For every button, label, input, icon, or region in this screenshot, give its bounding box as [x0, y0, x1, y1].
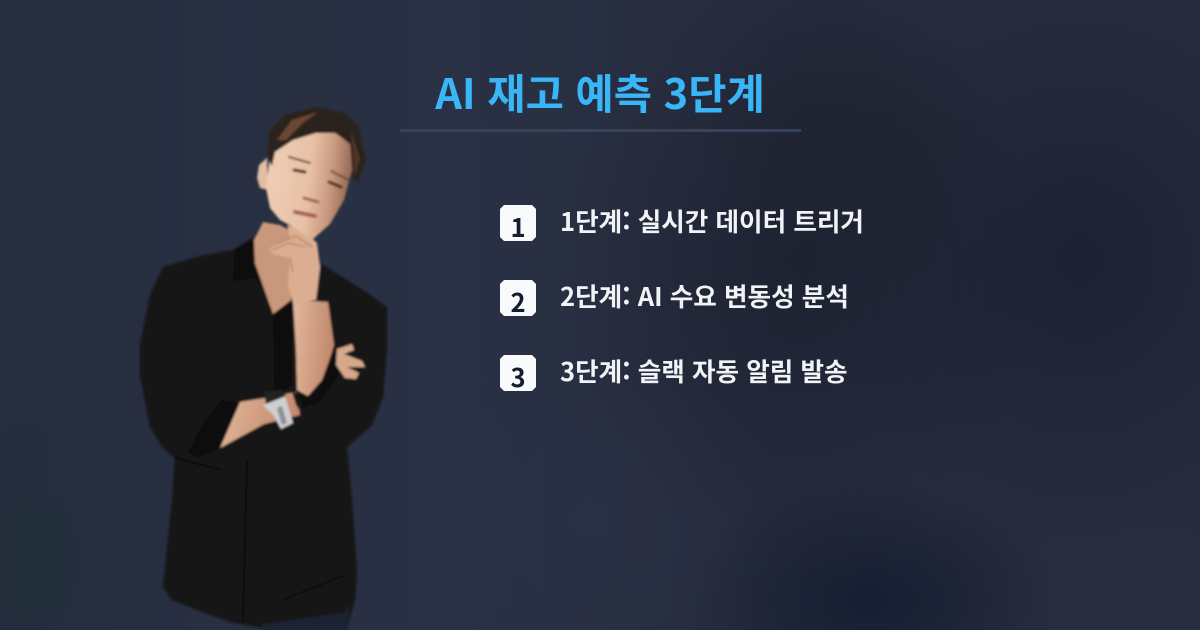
title: AI 재고 예측 3단계: [435, 61, 765, 121]
sleeve right: [292, 310, 387, 447]
step 3 text: 3단계: 슬랙 자동 알림 발송: [560, 352, 848, 389]
badge 2: 2: [510, 283, 526, 320]
badge 3: 3: [510, 358, 526, 395]
face: [266, 132, 352, 240]
step 1: [500, 202, 864, 241]
eyes, nose, mouth: [289, 157, 349, 216]
hair: [267, 107, 366, 183]
badge 2: [500, 280, 536, 316]
step 3: [500, 352, 848, 391]
hand: [270, 225, 320, 303]
ear: [257, 158, 268, 190]
watch: [263, 390, 293, 429]
chest and neck: [254, 222, 300, 314]
body shirt: [140, 236, 387, 628]
shirt fold lines: [175, 458, 345, 622]
shirt placket: [273, 300, 292, 398]
badge 3: [500, 355, 536, 391]
badge 1: [500, 205, 536, 241]
badge 1: 1: [510, 208, 526, 245]
upper arm: [293, 300, 334, 396]
forearm: [220, 392, 300, 448]
step 2 text: 2단계: AI 수요 변동성 분석: [560, 277, 849, 314]
step 2: [500, 277, 849, 316]
shirt cuff left: [188, 400, 240, 458]
trousers: [262, 604, 350, 630]
collar: [233, 238, 273, 313]
crossed fingers: [336, 344, 365, 379]
step 1 text: 1단계: 실시간 데이터 트리거: [560, 202, 864, 239]
